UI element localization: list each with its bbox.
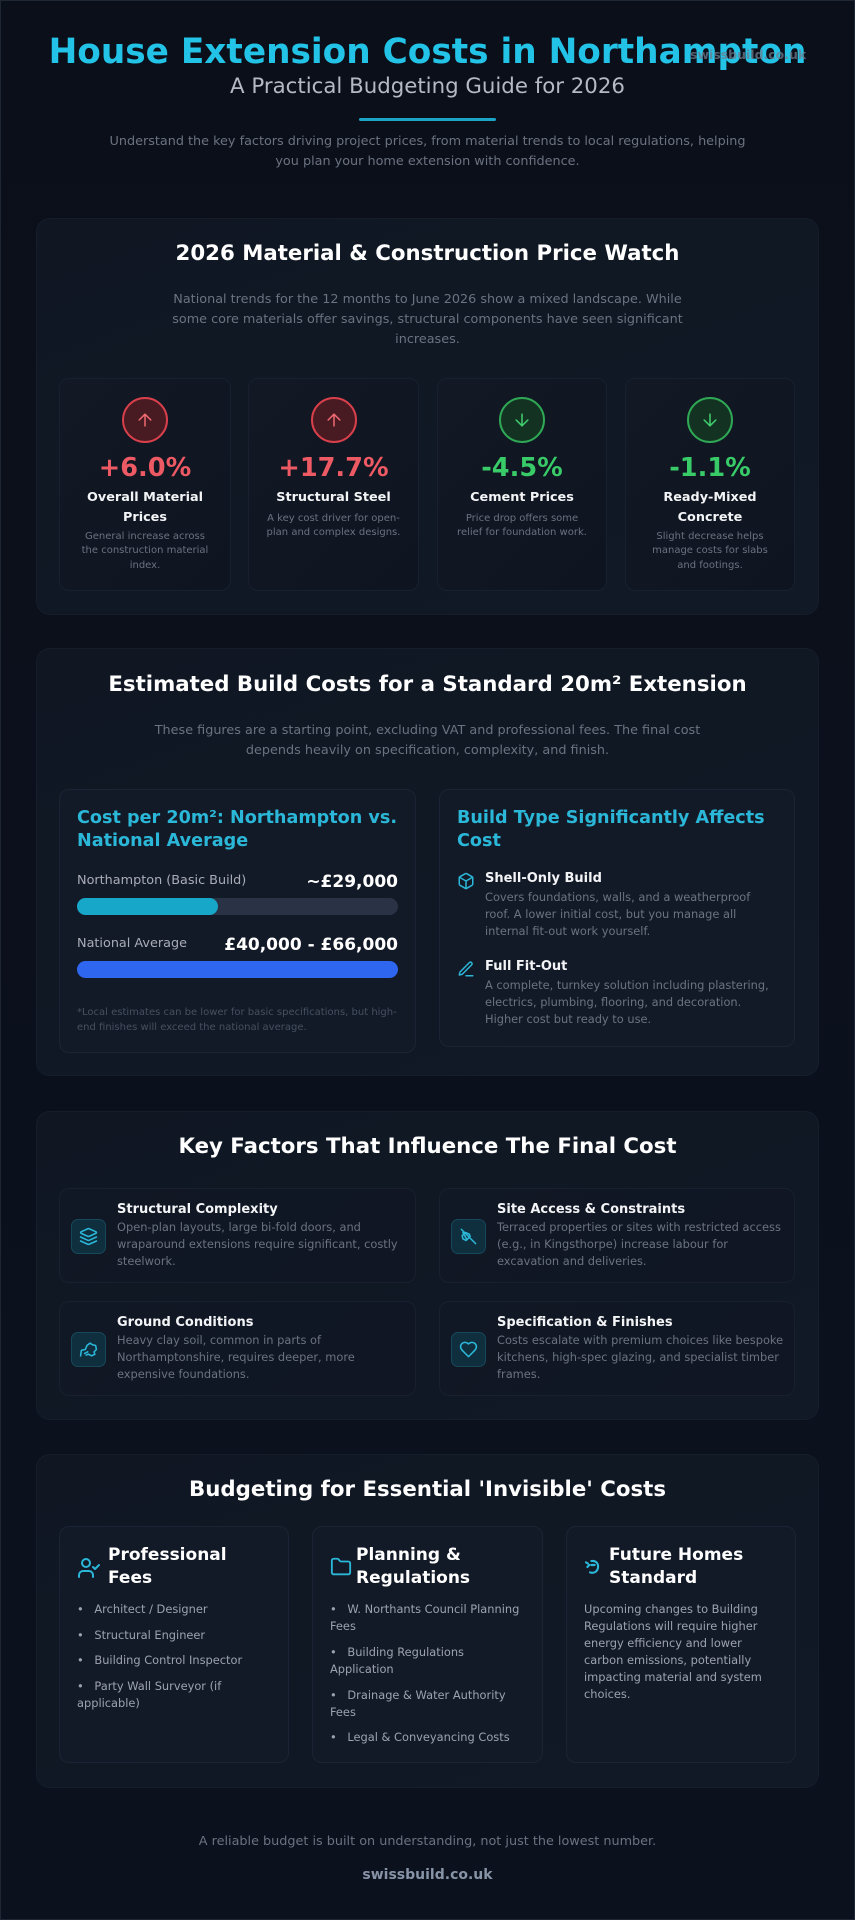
list item: Building Control Inspector bbox=[94, 1653, 242, 1667]
factor text: frames. bbox=[497, 1367, 540, 1381]
heading: build costs: Estimated Build Costs for a Standard 20m² Extension bbox=[108, 672, 747, 697]
card heading: Planning & bbox=[356, 1545, 461, 1565]
card: cost comparison bbox=[59, 789, 416, 1053]
panel: build costs bbox=[36, 648, 819, 1076]
factor text: excavation and deliveries. bbox=[497, 1254, 647, 1268]
bar chart: Northampton bbox=[77, 872, 398, 915]
price watch intro: increases. bbox=[395, 332, 460, 347]
value: +17.7% bbox=[278, 453, 389, 483]
factor text: kitchens, high-spec glazing, and specialist timber bbox=[497, 1350, 779, 1364]
list item: • bbox=[77, 1602, 84, 1616]
heading: invisible costs: Budgeting for Essential 'Invisible' Costs bbox=[189, 1477, 666, 1502]
icon: folder bbox=[330, 1558, 352, 1576]
icon: arrow up bbox=[311, 397, 357, 443]
list item: Fees bbox=[330, 1619, 356, 1633]
header divider bbox=[359, 118, 496, 121]
intro text: Understand the key factors driving project prices, from material trends to local regulations, helping bbox=[109, 134, 746, 149]
list item: Fees bbox=[330, 1705, 356, 1719]
paragraph: Regulations will require higher bbox=[584, 1619, 757, 1633]
description: and footings. bbox=[677, 560, 743, 571]
list item: Structural Engineer bbox=[94, 1628, 205, 1642]
heading: cost comparison: Cost per 20m²: Northampton vs. bbox=[77, 808, 397, 828]
description: Price drop offers some bbox=[466, 513, 578, 524]
label: National Average bbox=[77, 936, 187, 951]
heading: price watch: 2026 Material & Construction Price Watch bbox=[176, 241, 679, 266]
item title: Shell-Only Build bbox=[485, 871, 602, 886]
list item: Legal & Conveyancing Costs bbox=[347, 1730, 510, 1744]
item text bbox=[485, 890, 750, 938]
factor text: Costs escalate with premium choices like bespoke bbox=[497, 1333, 783, 1347]
heading: build type: Cost bbox=[457, 831, 501, 851]
label: Cement Prices bbox=[470, 490, 574, 505]
icon: layers bbox=[71, 1219, 106, 1254]
factor title: Site Access & Constraints bbox=[497, 1202, 685, 1217]
item text: roof. A lower initial cost, but you manage all bbox=[485, 907, 736, 921]
factor title: Specification & Finishes bbox=[497, 1315, 673, 1330]
item text: internal fit-out work yourself. bbox=[485, 924, 650, 938]
description: relief for foundation work. bbox=[457, 527, 587, 538]
list item: W. Northants Council Planning bbox=[347, 1602, 519, 1616]
list item: • bbox=[330, 1730, 337, 1744]
footnote bbox=[77, 1007, 397, 1033]
heading: cost comparison: National Average bbox=[77, 831, 248, 851]
list item: Building Regulations bbox=[347, 1645, 464, 1659]
factor text: Northamptonshire, requires deeper, more bbox=[117, 1350, 355, 1364]
list item: • bbox=[330, 1645, 337, 1659]
factor: ground conditions bbox=[59, 1301, 416, 1396]
list item: • bbox=[330, 1602, 337, 1616]
description bbox=[457, 513, 587, 538]
list item: • bbox=[77, 1628, 84, 1642]
footnote: end finishes will exceed the national average. bbox=[77, 1022, 307, 1033]
label bbox=[87, 490, 203, 525]
paragraph: carbon emissions, potentially bbox=[584, 1653, 751, 1667]
list item bbox=[330, 1688, 506, 1719]
item: shell-only build bbox=[458, 871, 750, 938]
factor: structural complexity bbox=[59, 1188, 416, 1283]
item text: Higher cost but ready to use. bbox=[485, 1012, 651, 1026]
footer brand: swissbuild.co.uk bbox=[362, 1867, 493, 1883]
list item: Party Wall Surveyor (if bbox=[94, 1679, 221, 1693]
bar bbox=[77, 961, 398, 978]
value: £40,000 - £66,000 bbox=[224, 935, 398, 955]
list item: Application bbox=[330, 1662, 394, 1676]
card: cement prices bbox=[437, 378, 607, 591]
item: full fit-out bbox=[458, 959, 769, 1026]
bar bbox=[77, 898, 398, 915]
title: House Extension Costs in Northampton bbox=[49, 32, 806, 72]
heading: build type: Build Type Significantly Affects bbox=[457, 808, 765, 828]
card heading: Regulations bbox=[356, 1568, 470, 1588]
icon: restricted tool bbox=[451, 1219, 486, 1254]
build costs intro: These figures are a starting point, excluding VAT and professional fees. The final cost bbox=[155, 723, 700, 738]
list item: Drainage & Water Authority bbox=[347, 1688, 506, 1702]
description: A key cost driver for open- bbox=[267, 513, 400, 524]
card heading: Fees bbox=[108, 1568, 152, 1588]
value: ~£29,000 bbox=[306, 872, 398, 892]
item text: Covers foundations, walls, and a weatherproof bbox=[485, 890, 750, 904]
list item: • bbox=[77, 1653, 84, 1667]
factor text bbox=[497, 1333, 783, 1381]
subtitle: A Practical Budgeting Guide for 2026 bbox=[230, 74, 625, 99]
paragraph: choices. bbox=[584, 1687, 630, 1701]
factor text: Terraced properties or sites with restricted access bbox=[497, 1220, 781, 1234]
description bbox=[652, 531, 768, 571]
icon: ground bbox=[71, 1332, 106, 1367]
price watch intro bbox=[172, 292, 683, 347]
card: overall material prices bbox=[59, 378, 231, 591]
label: Structural Steel bbox=[276, 490, 391, 505]
heading: cost comparison bbox=[77, 808, 397, 851]
value: -4.5% bbox=[481, 453, 563, 483]
description: General increase across bbox=[85, 531, 205, 542]
card: ready-mixed concrete bbox=[625, 378, 795, 591]
watermark: swissbuild.co.uk bbox=[690, 47, 806, 62]
item title: Full Fit-Out bbox=[485, 959, 567, 974]
factor text: Heavy clay soil, common in parts of bbox=[117, 1333, 321, 1347]
intro text bbox=[109, 134, 746, 169]
description: Slight decrease helps bbox=[656, 531, 764, 542]
card: professional fees bbox=[59, 1526, 289, 1763]
factor text: expensive foundations. bbox=[117, 1367, 249, 1381]
label: Northampton (Basic Build) bbox=[77, 873, 246, 888]
build costs intro bbox=[154, 723, 700, 758]
card heading bbox=[108, 1545, 227, 1588]
factor: site access bbox=[439, 1188, 795, 1283]
paragraph: Upcoming changes to Building bbox=[584, 1602, 758, 1616]
description: the construction material bbox=[82, 545, 208, 556]
list item: • bbox=[77, 1679, 84, 1693]
factor text bbox=[497, 1220, 781, 1268]
list item: Architect / Designer bbox=[94, 1602, 208, 1616]
panel: invisible costs bbox=[36, 1454, 819, 1788]
factor text bbox=[117, 1333, 355, 1381]
item text: electrics, plumbing, flooring, and decoration. bbox=[485, 995, 741, 1009]
list bbox=[330, 1602, 519, 1744]
card heading: Future Homes bbox=[609, 1545, 743, 1565]
factor text: Open-plan layouts, large bi-fold doors, and bbox=[117, 1220, 361, 1234]
card heading bbox=[356, 1545, 470, 1588]
footer note: A reliable budget is built on understanding, not just the lowest number. bbox=[199, 1834, 656, 1849]
item text bbox=[485, 978, 769, 1026]
factor: specification bbox=[439, 1301, 795, 1396]
card heading: Standard bbox=[609, 1568, 697, 1588]
item text: A complete, turnkey solution including plastering, bbox=[485, 978, 769, 992]
factor text: steelwork. bbox=[117, 1254, 176, 1268]
price watch intro: National trends for the 12 months to June 2026 show a mixed landscape. While bbox=[173, 292, 682, 307]
description bbox=[82, 531, 208, 571]
panel: price watch bbox=[36, 218, 819, 615]
description: plan and complex designs. bbox=[267, 527, 400, 538]
value: -1.1% bbox=[669, 453, 751, 483]
heading: build type bbox=[457, 808, 765, 851]
label: Overall Material bbox=[87, 490, 203, 505]
card: build type bbox=[439, 789, 795, 1047]
card: structural steel bbox=[248, 378, 419, 591]
list item bbox=[330, 1602, 519, 1633]
bar chart: national average bbox=[77, 935, 398, 978]
build costs intro: depends heavily on specification, complexity, and finish. bbox=[246, 743, 609, 758]
label: Ready-Mixed bbox=[663, 490, 757, 505]
label: Concrete bbox=[678, 510, 742, 525]
description: index. bbox=[130, 560, 160, 571]
list item: • bbox=[330, 1688, 337, 1702]
card heading bbox=[609, 1545, 743, 1588]
description bbox=[267, 513, 400, 538]
intro text: you plan your home extension with confidence. bbox=[275, 154, 580, 169]
paragraph: energy efficiency and lower bbox=[584, 1636, 742, 1650]
factor title: Structural Complexity bbox=[117, 1202, 278, 1217]
factor text bbox=[117, 1220, 398, 1268]
icon: leaf crescent bbox=[584, 1560, 600, 1574]
list item bbox=[330, 1645, 464, 1676]
card: future homes standard bbox=[566, 1526, 796, 1763]
card: planning and regulations bbox=[312, 1526, 543, 1763]
list bbox=[77, 1602, 242, 1710]
value: +6.0% bbox=[99, 453, 191, 483]
card heading: Professional bbox=[108, 1545, 227, 1565]
factor text: wraparound extensions require significant, costly bbox=[117, 1237, 398, 1251]
description: manage costs for slabs bbox=[652, 545, 768, 556]
icon: arrow up bbox=[122, 397, 168, 443]
list item: applicable) bbox=[77, 1696, 140, 1710]
factor title: Ground Conditions bbox=[117, 1315, 253, 1330]
list item bbox=[77, 1679, 222, 1710]
panel: key factors bbox=[36, 1111, 819, 1420]
factor text: (e.g., in Kingsthorpe) increase labour for bbox=[497, 1237, 728, 1251]
label bbox=[663, 490, 757, 525]
icon: heart bbox=[451, 1332, 486, 1367]
footnote: *Local estimates can be lower for basic specifications, but high- bbox=[77, 1007, 397, 1018]
heading: key factors: Key Factors That Influence The Final Cost bbox=[178, 1134, 677, 1159]
price watch intro: some core materials offer savings, structural components have seen significant bbox=[172, 312, 683, 327]
icon: arrow down bbox=[687, 397, 733, 443]
icon: arrow down bbox=[499, 397, 545, 443]
icon: pen bbox=[458, 961, 474, 976]
icon: box bbox=[458, 872, 474, 890]
icon: user check bbox=[78, 1558, 100, 1578]
paragraph: impacting material and system bbox=[584, 1670, 762, 1684]
label: Prices bbox=[123, 510, 167, 525]
paragraph bbox=[584, 1601, 762, 1704]
